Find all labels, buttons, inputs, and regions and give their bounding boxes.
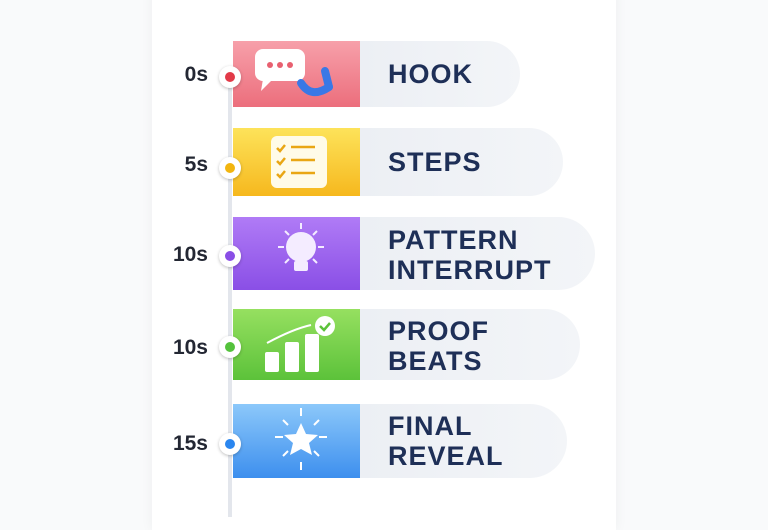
pill: PROOF BEATS: PROOF [388, 316, 489, 346]
row: final reveal [173, 404, 567, 478]
pill: STEPS: STEPS [388, 147, 482, 177]
pill: FINAL REVEAL [360, 404, 567, 478]
row: steps [185, 128, 563, 196]
pill: PATTERN INTERRUPT [360, 217, 595, 290]
card [152, 0, 616, 530]
pill: HOOK [360, 41, 520, 107]
color block with chart icon [233, 309, 360, 380]
row: proof beats [173, 309, 580, 380]
row: pattern interrupt [173, 217, 595, 290]
pill: PATTERN INTERRUPT: INTERRUPT [388, 255, 552, 285]
color block with star icon [233, 404, 360, 478]
row: final reveal: 15s [173, 432, 208, 455]
row: proof beats: 10s [173, 336, 208, 359]
color block with lightbulb icon [233, 217, 360, 290]
row: pattern interrupt: 10s [173, 243, 208, 266]
pill: PROOF BEATS: BEATS [388, 346, 483, 376]
row: steps: 5s [185, 153, 208, 176]
row: hook [185, 41, 520, 107]
pill: FINAL REVEAL: REVEAL [388, 441, 504, 471]
pill: PROOF BEATS [360, 309, 580, 380]
time label: 0s [185, 63, 208, 86]
color block with chat/phone icon [233, 41, 360, 107]
pill: PATTERN INTERRUPT: PATTERN [388, 225, 518, 255]
pill: STEPS [360, 128, 563, 196]
timeline dot [219, 66, 241, 88]
pill: FINAL REVEAL: FINAL [388, 411, 472, 441]
pill: HOOK: HOOK [388, 59, 473, 89]
color block with checklist icon [233, 128, 360, 196]
